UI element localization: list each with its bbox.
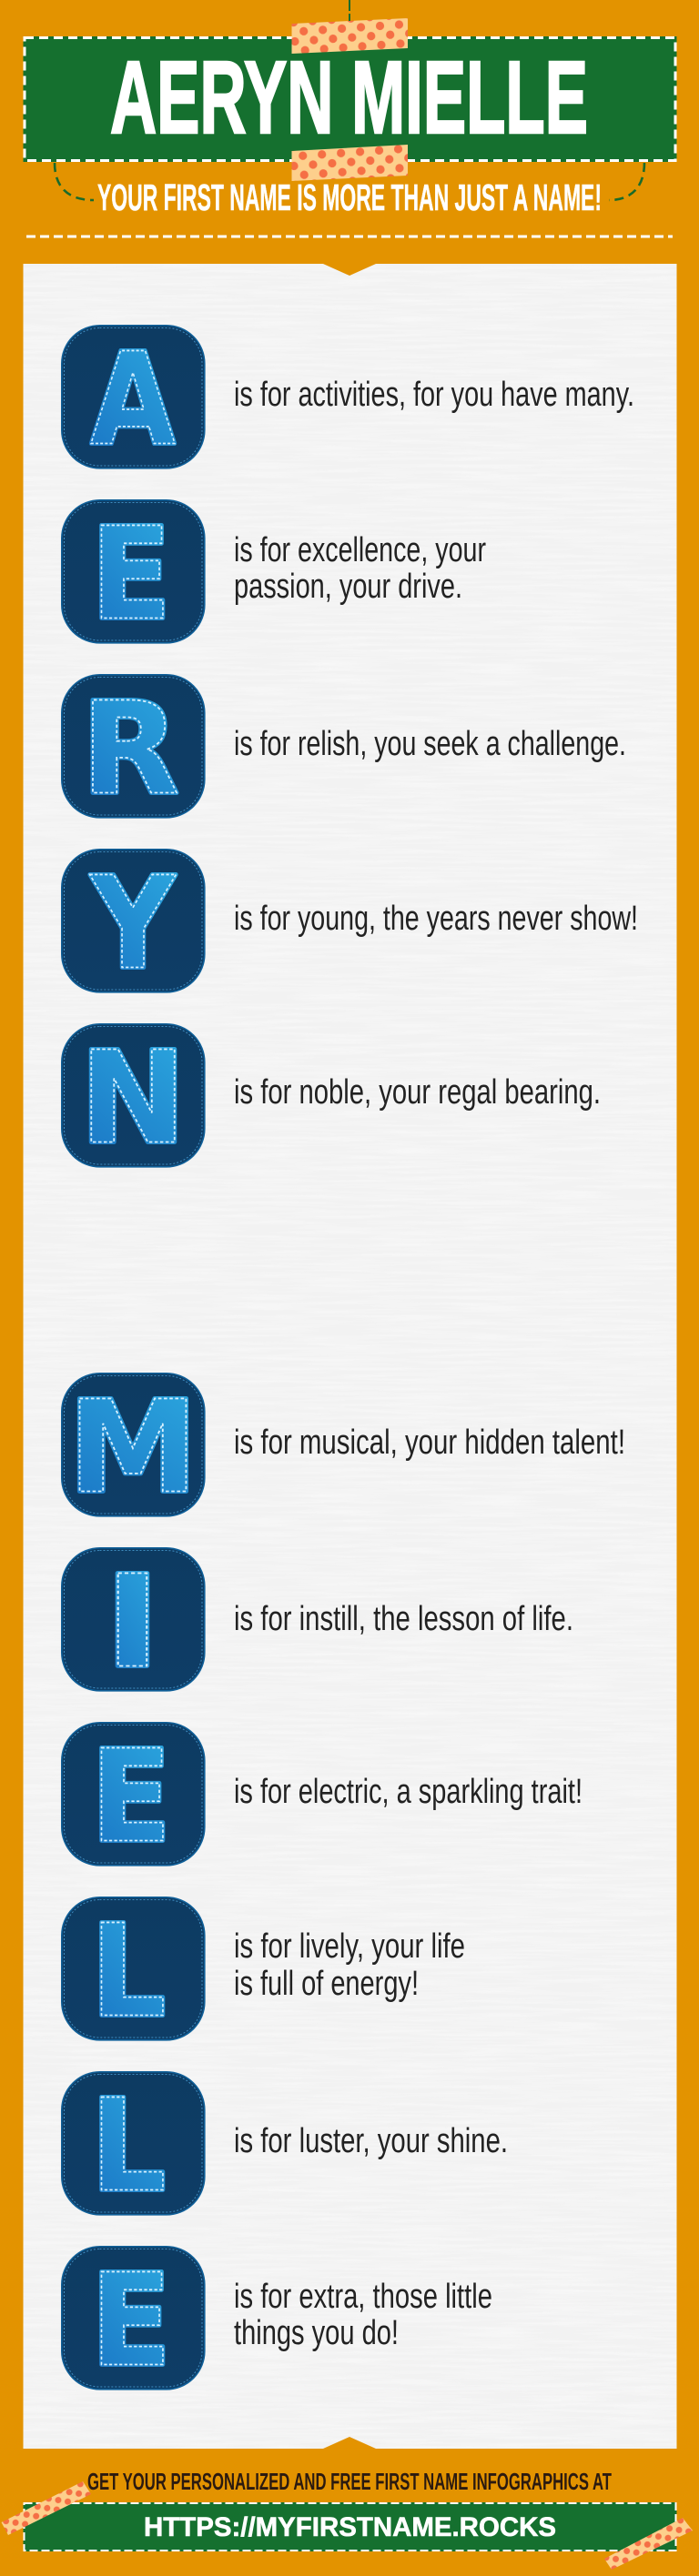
text: E (234, 531, 486, 606)
badge: E: E (91, 2247, 171, 2395)
row: Y (62, 850, 638, 998)
badge: I: I (104, 1548, 161, 1696)
footer (2, 2468, 693, 2570)
right tape (604, 2518, 693, 2570)
badge: L: L (91, 2072, 166, 2220)
row: E (62, 2247, 492, 2395)
top notch (323, 264, 376, 276)
row: I (62, 1548, 573, 1696)
badge: E: E (91, 500, 171, 649)
text: L (234, 1927, 465, 2003)
row: E (62, 1723, 582, 1871)
text: E (234, 2278, 492, 2352)
badge: Y: Y (89, 850, 177, 998)
badge: R (62, 675, 205, 824)
text: L: is for lively, your life (234, 1927, 465, 1966)
bottom notch (323, 2437, 376, 2449)
row: E (62, 500, 486, 649)
badge: L: L (91, 2072, 166, 2220)
badge: L (62, 1897, 205, 2046)
footer banner (24, 2502, 677, 2551)
badge: E (62, 500, 205, 649)
badge: A: A (90, 326, 176, 474)
top tape (291, 18, 408, 54)
text: E: is for extra, those little (234, 2278, 492, 2316)
row: N (62, 1024, 601, 1173)
badge: I (62, 1548, 205, 1696)
text: L: is for luster, your shine. (234, 2122, 508, 2160)
row: L (62, 2072, 508, 2220)
badge: L: L (91, 1897, 166, 2046)
badge: M: M (67, 1373, 198, 1522)
text: N: is for noble, your regal bearing. (234, 1073, 601, 1112)
badge: Y (62, 850, 205, 998)
badge: N: N (79, 1024, 187, 1173)
row: M (62, 1373, 625, 1522)
text: I: is for instill, the lesson of life. (234, 1600, 573, 1638)
row: R (62, 675, 626, 824)
title banner (24, 36, 677, 162)
badge: L (62, 2072, 205, 2220)
text: E: is for electric, a sparkling trait! (234, 1773, 582, 1811)
badge: M: M (67, 1373, 198, 1522)
badge: E: E (91, 1723, 171, 1871)
left tape (2, 2481, 91, 2535)
badge: A (62, 326, 205, 474)
badge: A: A (90, 326, 176, 474)
row: L (62, 1897, 465, 2046)
badge: L: L (91, 1897, 166, 2046)
text: L: is full of energy! (234, 1965, 419, 2003)
bottom tape (291, 145, 408, 181)
text: E: is for excellence, your (234, 531, 486, 569)
badge: R: R (81, 675, 179, 824)
badge: E (62, 2247, 205, 2395)
badge: E (62, 1723, 205, 1871)
right curved stitch (609, 163, 644, 200)
text: E: passion, your drive. (234, 568, 462, 606)
badge: N: N (79, 1024, 187, 1173)
row: A (62, 326, 634, 474)
badge: E: E (91, 500, 171, 649)
badge: E: E (91, 2247, 171, 2395)
left curved stitch (55, 163, 94, 200)
header (24, 0, 677, 218)
badge: R: R (81, 675, 179, 824)
badge: Y: Y (89, 850, 177, 998)
text: E: things you do! (234, 2314, 399, 2352)
url: HTTPS://MYFIRSTNAME.ROCKS (144, 2512, 556, 2542)
badge: E: E (91, 1723, 171, 1871)
main panel (24, 264, 677, 2449)
badge: I: I (104, 1548, 161, 1696)
hanging thread (349, 0, 350, 22)
